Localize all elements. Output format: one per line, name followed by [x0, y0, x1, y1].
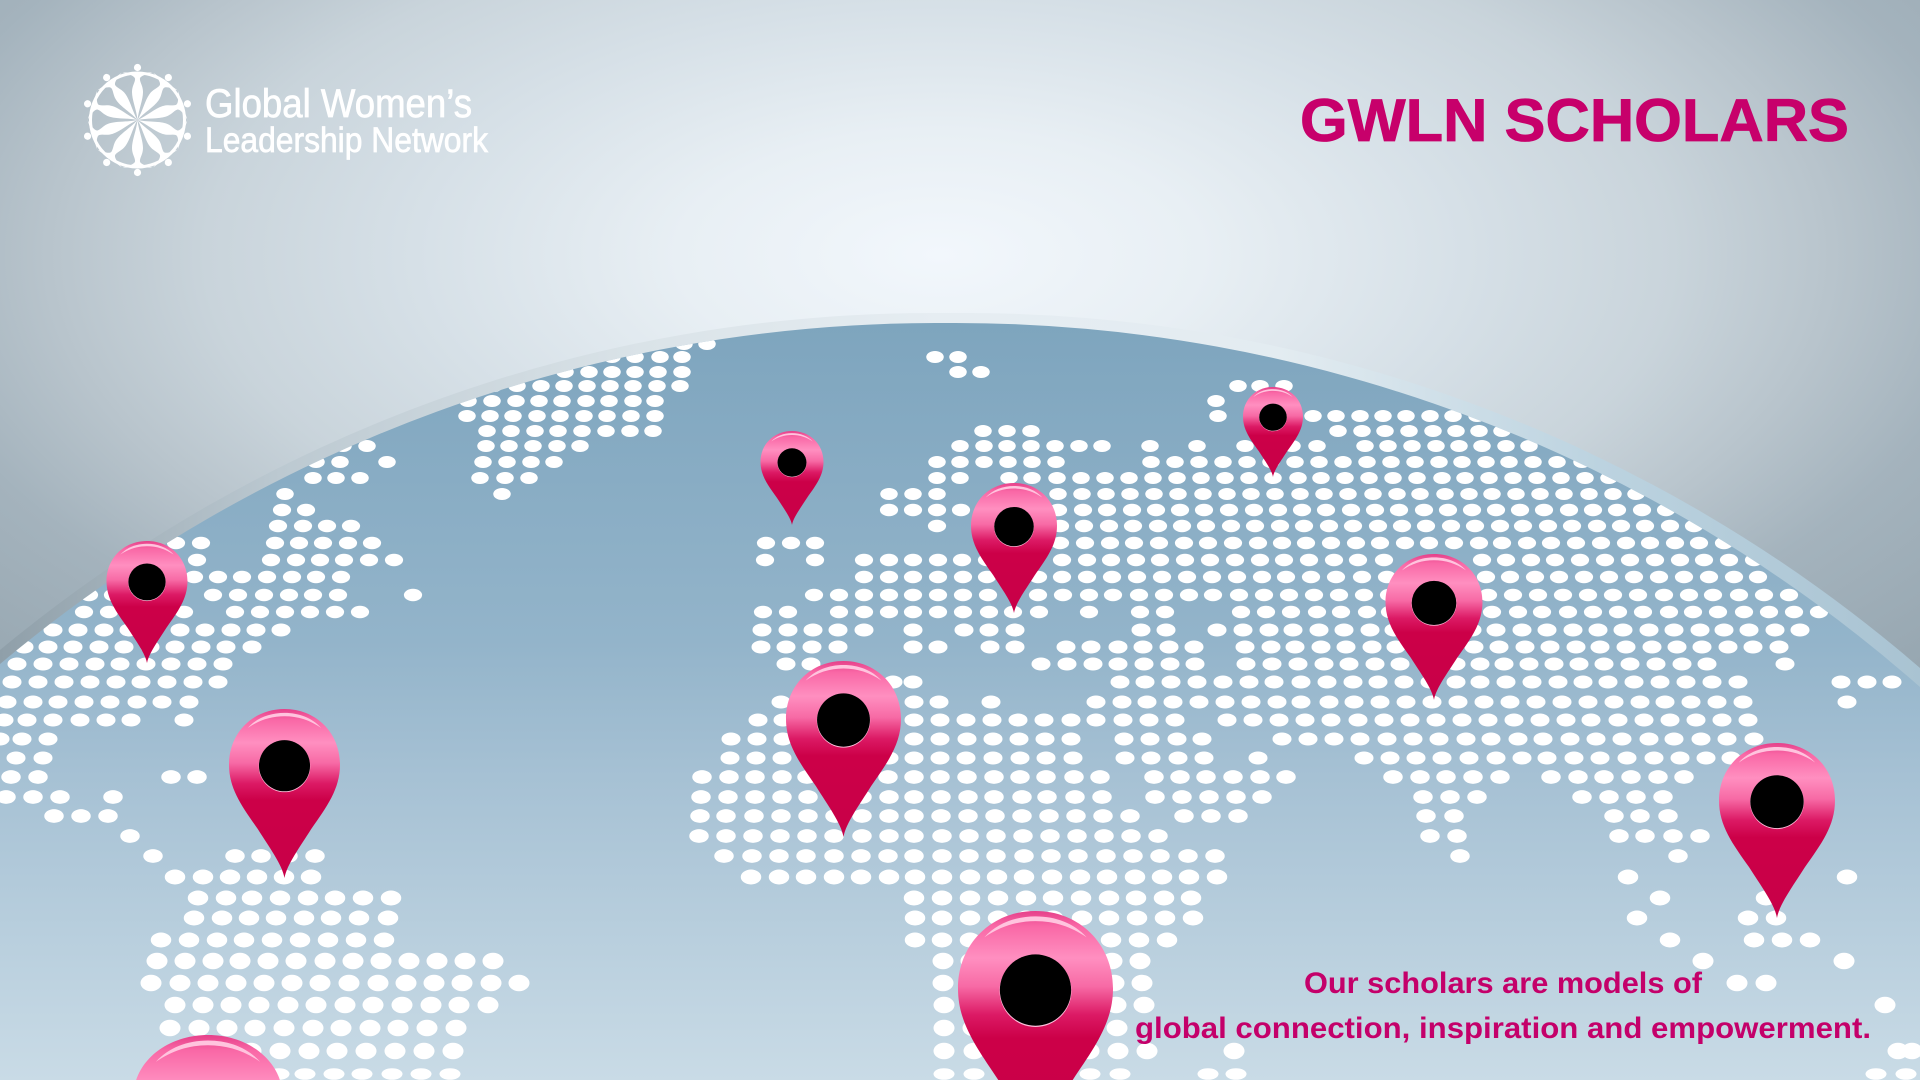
globe rim: [0, 313, 1920, 1080]
pin: Central Africa: [958, 911, 1113, 1080]
pin: Pacific north-west: [106, 541, 188, 663]
caption: global connection, inspiration and empowerment.: [1135, 1012, 1871, 1045]
logo wordmark: Leadership Network: [205, 121, 488, 160]
logo emblem: [83, 64, 192, 176]
logo: Global Women's Leadership Network: [83, 64, 488, 176]
pin: Russia: [1243, 387, 1303, 477]
caption: [1135, 967, 1871, 1045]
logo wordmark: Global Women’s: [205, 82, 472, 126]
dotted world map: [0, 344, 1912, 1074]
pin: North Atlantic: [760, 431, 824, 525]
pin: Central America: [229, 709, 340, 878]
title: GWLN SCHOLARS: [1300, 87, 1849, 154]
pin: West Africa: [786, 661, 901, 837]
map pins: [106, 387, 1835, 1080]
pin: South-East Asia: [1719, 743, 1835, 918]
globe sea surface: [0, 323, 1920, 1080]
caption: Our scholars are models of: [1304, 967, 1702, 1000]
pin: South America: [136, 1035, 280, 1080]
pin: Europe: [971, 483, 1057, 613]
pin: Asia: [1386, 554, 1482, 700]
logo wordmark: [205, 82, 488, 160]
